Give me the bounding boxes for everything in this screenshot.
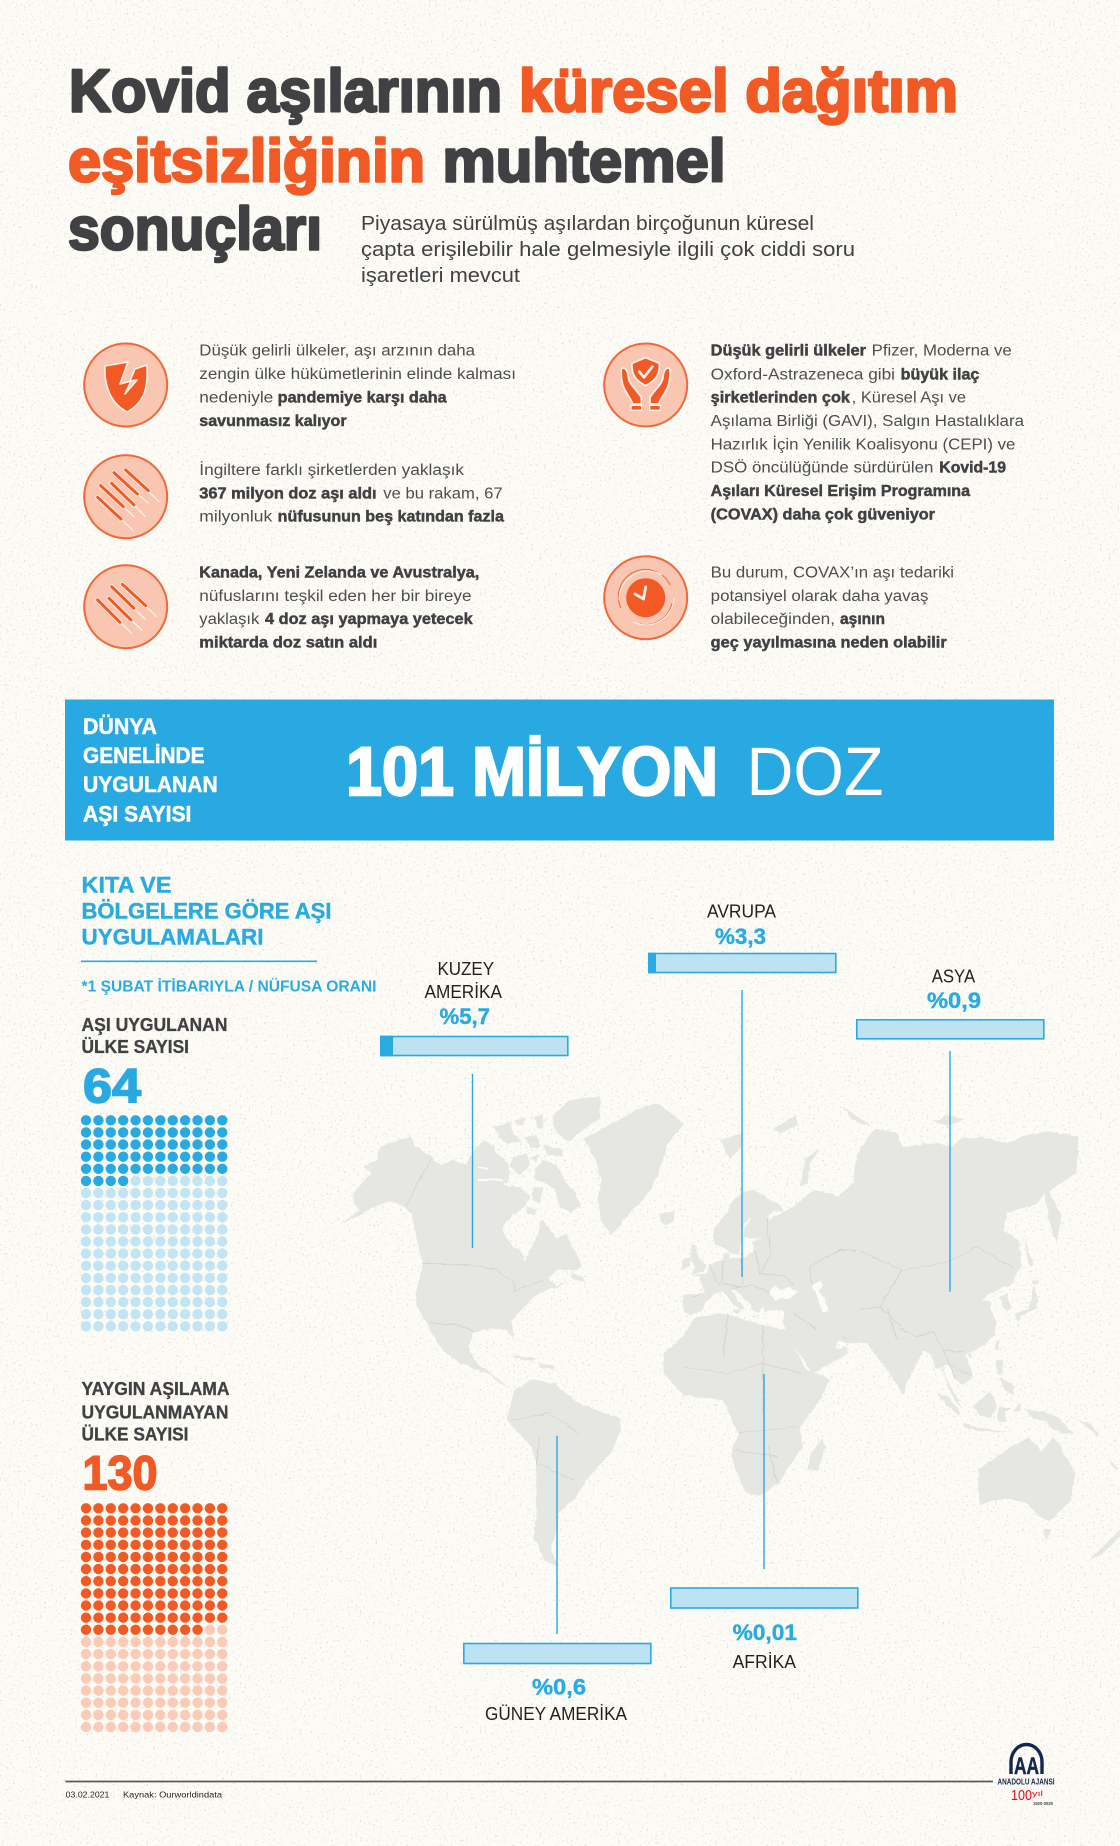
heading: by continent and region: UYGULAMALARI: [82, 925, 264, 950]
stat: countries without vaccination: [82, 1379, 230, 1500]
stat: countries without vaccination: ÜLKE SAYISI: [82, 1425, 188, 1445]
Mexico border and Greenland, South America, Africa: [430, 1103, 1120, 1567]
title: muhtemel: [442, 128, 726, 194]
banner: global doses: GENELİNDE: [83, 743, 204, 768]
text: low income countries: zengin ülke hükümetlerinin elinde kalması: [199, 366, 516, 383]
icon: clock with circular arrow: [604, 556, 687, 639]
footer: date and source: Kaynak: Ourworldindata: [123, 1790, 222, 1800]
text: COVAX reliance: Kovid-19: [939, 460, 1006, 477]
world map: [340, 1097, 1120, 1567]
callout: North America: AMERİKA: [424, 982, 502, 1002]
logo: Anadolu Ajansı: ANADOLU AJANSI: [998, 1776, 1054, 1786]
subtitle: [361, 213, 855, 287]
title: sonuçları: [68, 196, 322, 262]
callout: Asia: %0,9: [927, 988, 981, 1013]
text: slower supply: olabileceğinden,: [711, 611, 835, 628]
heading: by continent and region: BÖLGELERE GÖRE AŞI: [82, 899, 332, 924]
stat: vaccinating countries: ÜLKE SAYISI: [82, 1037, 189, 1057]
text: slower supply: [711, 564, 954, 651]
icon: hands protecting shield: [604, 344, 687, 426]
text: COVAX reliance: Aşıları Küresel Erişim Programına: [711, 483, 970, 500]
text: low income countries: [199, 343, 516, 430]
text: slower supply: aşının: [840, 611, 885, 628]
callout: Africa: %0,01: [733, 1620, 797, 1645]
callout: Europe: [648, 902, 836, 1277]
North and Central America: [340, 1097, 600, 1390]
text: COVAX reliance: (COVAX) daha çok güveniyor: [711, 506, 935, 523]
banner: global doses: DOZ: [746, 733, 884, 810]
banner: global doses: [65, 700, 1054, 840]
footer: date and source: [66, 1782, 993, 1800]
text: COVAX reliance: büyük ilaç: [901, 366, 980, 383]
text: COVAX reliance: Oxford-Astrazeneca gibi: [711, 366, 895, 383]
stat: countries without vaccination: YAYGIN AŞILAMA: [82, 1379, 230, 1399]
text: COVAX reliance: [711, 343, 1024, 523]
text: low income countries: pandemiye karşı daha: [278, 390, 447, 407]
stat: countries without vaccination: 130: [82, 1447, 158, 1500]
banner: global doses: 101 MİLYON: [346, 733, 718, 810]
callout: North America: KUZEY: [438, 959, 494, 979]
heading: by continent and region: [81, 873, 376, 996]
logo: Anadolu Ajansı: [998, 1744, 1054, 1806]
text: slower supply: Bu durum, COVAX’ın aşı tedariki: [711, 564, 954, 581]
title: [68, 58, 958, 262]
text: Canada New Zealand Australia: [199, 564, 479, 651]
text: COVAX reliance: , Küresel Aşı ve: [852, 390, 966, 407]
stat: vaccinating countries: AŞI UYGULANAN: [82, 1015, 228, 1035]
stat: vaccinating countries: 64: [83, 1061, 141, 1114]
callout: Europe: %3,3: [715, 924, 766, 949]
logo: Anadolu Ajansı: yıl: [1032, 1789, 1043, 1798]
dot grid: 64 countries: [86, 1120, 222, 1326]
callout: Asia: ASYA: [932, 967, 975, 987]
logo: Anadolu Ajansı: AA: [1014, 1753, 1039, 1780]
subtitle: Piyasaya sürülmüş aşılardan birçoğunun küresel: [361, 213, 814, 235]
dot grid: 130 countries: [86, 1508, 222, 1727]
logo: Anadolu Ajansı: 1920-2020: [1033, 1801, 1053, 1806]
callout: Africa: AFRİKA: [733, 1652, 796, 1672]
text: COVAX reliance: Hazırlık İçin Yenilik Koalisyonu (CEPI) ve: [711, 435, 1015, 453]
icon: broken shield: [84, 344, 167, 426]
Europe and Middle East: [660, 1190, 860, 1350]
text: low income countries: nedeniyle: [199, 390, 273, 407]
text: Canada New Zealand Australia: miktarda doz satın aldı: [199, 634, 377, 651]
callout: North America: %5,7: [440, 1004, 490, 1029]
heading: by continent and region: *1 ŞUBAT İTİBARIYLA / NÜFUSA ORANI: [82, 979, 376, 996]
text: Canada New Zealand Australia: yaklaşık: [199, 611, 260, 628]
subtitle: işaretleri mevcut: [361, 265, 520, 287]
heading: by continent and region: KITA VE: [82, 873, 172, 898]
text: low income countries: Düşük gelirli ülkeler, aşı arzının daha: [199, 343, 475, 360]
callout: Europe: AVRUPA: [707, 902, 776, 922]
text: COVAX reliance: Aşılama Birliği (GAVI), Salgın Hastalıklara: [711, 413, 1024, 430]
callout: South America: GÜNEY AMERİKA: [485, 1704, 627, 1724]
logo: Anadolu Ajansı: 100: [1011, 1787, 1032, 1804]
icon: five syringes: [84, 455, 167, 538]
text: slower supply: geç yayılmasına neden olabilir: [711, 634, 947, 651]
stat: countries without vaccination: UYGULANMAYAN: [82, 1402, 228, 1422]
callout: South America: %0,6: [532, 1674, 586, 1699]
text: Canada New Zealand Australia: 4 doz aşı yapmaya yetecek: [265, 611, 473, 628]
title: küresel dağıtım: [519, 58, 958, 124]
text: United Kingdom doses: 367 milyon doz aşı aldı: [199, 485, 377, 502]
text: United Kingdom doses: İngiltere farklı şirketlerden yaklaşık: [199, 461, 464, 479]
callout: North America: [380, 959, 568, 1248]
footer: date and source: 03.02.2021: [66, 1790, 110, 1800]
text: COVAX reliance: Düşük gelirli ülkeler: [711, 343, 866, 360]
callout: Africa: [671, 1374, 858, 1672]
text: Canada New Zealand Australia: nüfuslarını teşkil eden her bir bireye: [199, 588, 472, 605]
text: COVAX reliance: DSÖ öncülüğünde sürdürülen: [711, 459, 933, 477]
text: Canada New Zealand Australia: Kanada, Yeni Zelanda ve Avustralya,: [199, 564, 479, 581]
text: low income countries: savunmasız kalıyor: [199, 413, 347, 430]
Southeast Asia and Oceania: [900, 1280, 1100, 1435]
callout: Asia: [857, 967, 1044, 1292]
icon: four syringes: [84, 565, 167, 648]
text: United Kingdom doses: nüfusunun beş katından fazla: [278, 509, 504, 526]
banner: global doses: UYGULANAN: [83, 772, 218, 797]
text: United Kingdom doses: ve bu rakam, 67: [383, 485, 503, 502]
banner: global doses: AŞI SAYISI: [83, 802, 191, 826]
text: COVAX reliance: şirketlerinden çok: [711, 390, 850, 407]
text: COVAX reliance: Pfizer, Moderna ve: [872, 343, 1012, 360]
title: eşitsizliğinin: [68, 128, 425, 194]
banner: global doses: DÜNYA: [83, 714, 157, 739]
callout: South America: [464, 1436, 651, 1724]
title: Kovid aşılarının: [69, 58, 502, 124]
text: United Kingdom doses: milyonluk: [199, 509, 273, 526]
text: slower supply: potansiyel olarak daha yavaş: [711, 588, 929, 605]
stat: vaccinating countries: [82, 1015, 228, 1114]
text: United Kingdom doses: [199, 461, 504, 526]
subtitle: çapta erişilebilir hale gelmesiyle ilgili çok ciddi soru: [361, 239, 855, 261]
